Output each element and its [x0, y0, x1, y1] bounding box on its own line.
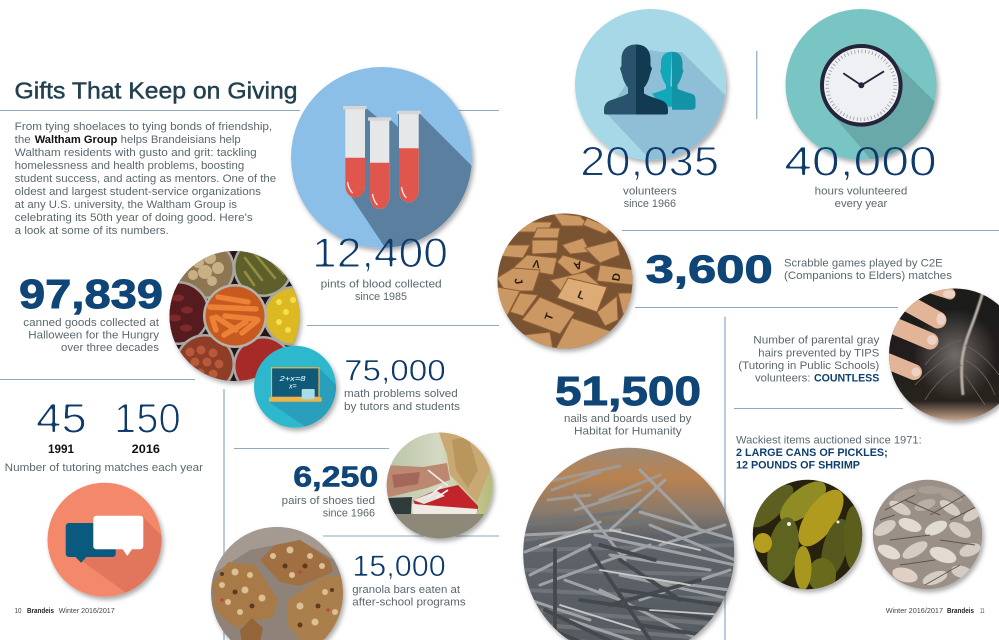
stat: 40,000 hours volunteered	[784, 138, 937, 210]
stat: 12,400 pints of blood	[312, 229, 448, 303]
stat: 51,500 nails and boards: nails and boards used by	[564, 413, 692, 425]
stat: 15,000 granola bars: 15,000	[352, 550, 446, 583]
icon: volunteers silhouettes	[575, 9, 730, 170]
stat: 3,600 scrabble games	[646, 249, 952, 292]
intro text block: homelessness and health problems, boosting	[15, 160, 244, 172]
stat: 97,839 canned goods: canned goods collected at	[23, 317, 160, 329]
intro text block: helps Brandeisians help	[121, 134, 241, 146]
stat: 3,600 scrabble games: 3,600	[646, 249, 773, 292]
stat: 75,000 math problems: math problems solved	[344, 388, 458, 400]
footer left: Winter 2016/2017	[59, 606, 115, 615]
photo: pickles	[744, 474, 862, 592]
intro text block: student success, and acting as mentors. One of the	[15, 173, 276, 185]
footer right: Winter 2016/2017	[886, 606, 943, 615]
stat: 6,250 pairs of shoes: pairs of shoes tied	[282, 495, 375, 507]
icon: chalkboard: 2+x=8	[278, 374, 307, 383]
text: gray hairs: Number of parental gray	[753, 335, 880, 347]
photo: granola bars	[211, 527, 345, 640]
photo: scrabble tiles: D	[610, 272, 624, 282]
photo: tying a shoe	[385, 430, 495, 544]
stat: 51,500 nails and boards: Habitat for Humanity	[574, 425, 682, 437]
text: gray hairs: volunteers:	[755, 372, 810, 384]
text: wackiest items: 2 LARGE CANS OF PICKLES;	[736, 447, 888, 459]
text: gray hairs	[738, 335, 880, 384]
stat: tutoring matches 45 and 150: 150	[114, 394, 181, 441]
icon: speech bubbles	[48, 483, 175, 600]
stat: 20,035 volunteers: volunteers	[623, 186, 677, 198]
stat: 12,400 pints of blood: 12,400	[312, 229, 448, 276]
photo: shrimp	[872, 480, 983, 589]
intro text block: oldest and largest student-service organizations	[15, 186, 261, 198]
stat: 6,250 pairs of shoes	[282, 462, 378, 520]
stat: 97,839 canned goods: over three decades	[61, 342, 159, 354]
stat: 12,400 pints of blood: pints of blood collected	[321, 278, 442, 290]
photo: scrabble tiles	[492, 213, 635, 350]
text: wackiest items: 12 POUNDS OF SHRIMP	[736, 459, 861, 471]
footer left: Brandeis	[27, 606, 54, 615]
footer right: 11	[980, 606, 984, 615]
stat: 20,035 volunteers: since 1966	[624, 198, 676, 210]
icon: test tubes of blood	[290, 67, 477, 254]
stat: 97,839 canned goods	[19, 271, 163, 354]
photo: hair and fingers	[875, 286, 999, 420]
stat: 40,000 hours volunteered: hours volunteered	[815, 186, 907, 198]
stat: tutoring matches 45 and 150: 45	[36, 394, 87, 441]
stat: 3,600 scrabble games: (Companions to Elders) matches	[784, 270, 952, 282]
stat: tutoring matches 45 and 150: 2016	[132, 442, 160, 456]
stat: 51,500 nails and boards: 51,500	[555, 368, 701, 414]
stat: 6,250 pairs of shoes: 6,250	[293, 462, 378, 494]
text: gray hairs: hairs prevented by TIPS	[758, 347, 879, 359]
footer right	[886, 606, 984, 615]
stat: 97,839 canned goods: Halloween for the Hungry	[28, 330, 159, 342]
icon: chalkboard	[254, 346, 345, 430]
intro text block: Waltham Group	[35, 134, 117, 146]
title: Gifts That Keep on Giving	[14, 78, 298, 104]
text: gray hairs: COUNTLESS	[814, 372, 880, 384]
intro text block	[15, 121, 276, 237]
photo: scrabble tiles: J	[511, 277, 524, 285]
footer right: Brandeis	[947, 606, 974, 615]
stat: 12,400 pints of blood: since 1985	[355, 291, 407, 303]
stat: 15,000 granola bars: after-school programs	[352, 597, 466, 609]
text: gray hairs: (Tutoring in Public Schools)	[738, 360, 880, 372]
intro text block: a look at some of its numbers.	[15, 225, 169, 237]
intro text block: at any U.S. university, the Waltham Group is	[15, 199, 237, 211]
photo: canned goods	[168, 251, 304, 387]
stat: 15,000 granola bars	[352, 550, 466, 609]
stat: 20,035 volunteers	[580, 138, 719, 210]
stat: 40,000 hours volunteered: every year	[835, 198, 888, 210]
photo: scrabble tiles: L	[576, 289, 587, 303]
stat: 75,000 math problems	[344, 355, 460, 413]
stat: tutoring matches 45 and 150: Number of tutoring matches each year	[5, 462, 203, 474]
icon: chalkboard: x=	[288, 384, 297, 390]
icon: clock	[786, 9, 940, 170]
photo: scrabble tiles: V	[531, 257, 541, 270]
intro text block: From tying shoelaces to tying bonds of friendship,	[15, 121, 272, 133]
stat: 97,839 canned goods: 97,839	[19, 271, 163, 317]
stat: 6,250 pairs of shoes: since 1966	[323, 508, 375, 520]
photo: pile of nails	[523, 448, 735, 640]
stat: 20,035 volunteers: 20,035	[580, 138, 719, 185]
stat: 40,000 hours volunteered: 40,000	[784, 138, 937, 185]
stat: 3,600 scrabble games: Scrabble games played by C2E	[784, 258, 943, 270]
footer left: 10	[14, 606, 22, 615]
stat: 15,000 granola bars: granola bars eaten at	[352, 584, 461, 596]
stat: 75,000 math problems: 75,000	[344, 355, 446, 388]
footer left	[14, 606, 115, 615]
intro text block: Waltham residents with gusto and grit: tackling	[15, 147, 257, 159]
stat: tutoring matches 45 and 150	[5, 394, 203, 474]
photo: scrabble tiles: A	[572, 258, 583, 272]
intro text block: the	[15, 134, 31, 146]
photo: scrabble tiles: T	[543, 311, 557, 322]
stat: 51,500 nails and boards	[555, 368, 701, 437]
text: wackiest items: Wackiest items auctioned since 1971:	[736, 434, 922, 446]
stat: tutoring matches 45 and 150: 1991	[48, 442, 74, 456]
text: wackiest items	[736, 434, 922, 471]
stat: 75,000 math problems: by tutors and students	[344, 401, 460, 413]
intro text block: celebrating its 50th year of doing good. Here's	[15, 212, 253, 224]
